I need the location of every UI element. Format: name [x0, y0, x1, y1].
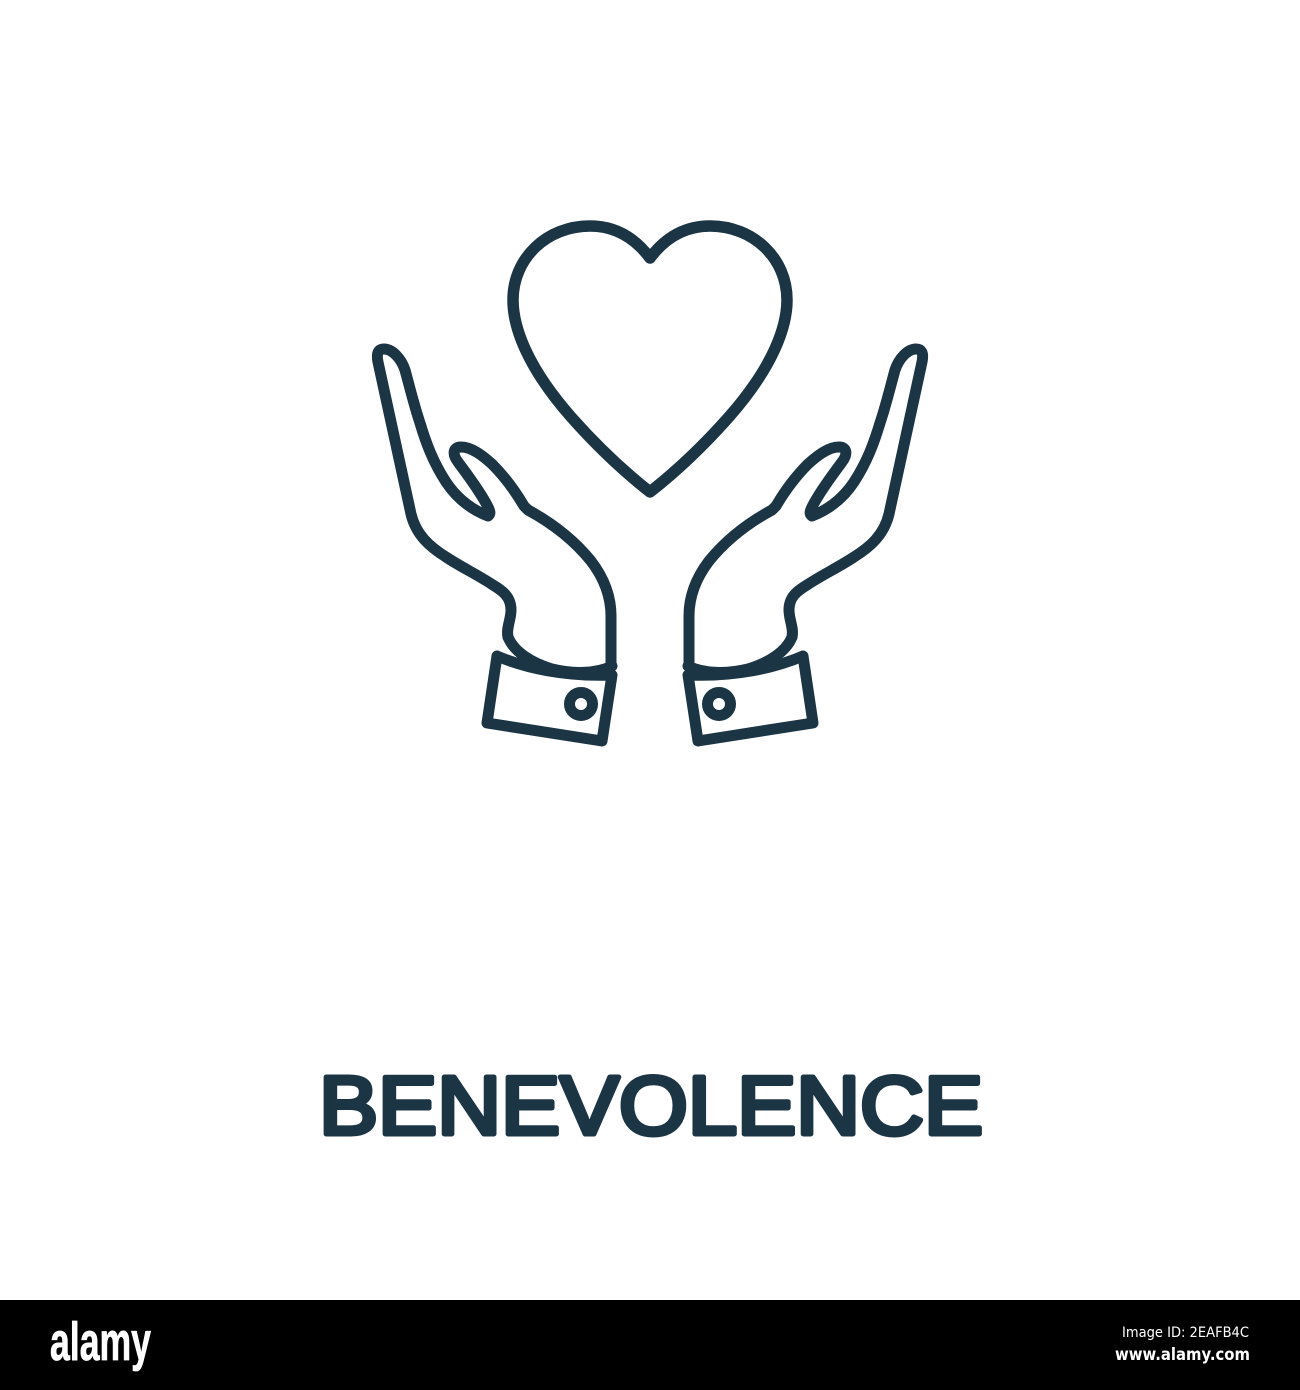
website: www.alamy.com	[1115, 1345, 1250, 1365]
icon: heart	[513, 226, 787, 492]
cuff button	[570, 692, 592, 716]
cuff button	[708, 692, 730, 716]
logo: alamy: alamy	[50, 1312, 151, 1372]
hand base curve	[508, 637, 612, 672]
icon: right hand	[688, 349, 923, 741]
icon: hands holding heart	[377, 226, 923, 741]
cuff	[688, 656, 813, 741]
cuff	[487, 656, 612, 741]
footer bar	[0, 1300, 1300, 1390]
hand base curve	[688, 637, 792, 672]
image id: Image ID: 2EAFB4C	[1122, 1325, 1249, 1341]
title: BENEVOLENCE	[319, 1059, 983, 1152]
icon: left hand	[377, 349, 612, 741]
